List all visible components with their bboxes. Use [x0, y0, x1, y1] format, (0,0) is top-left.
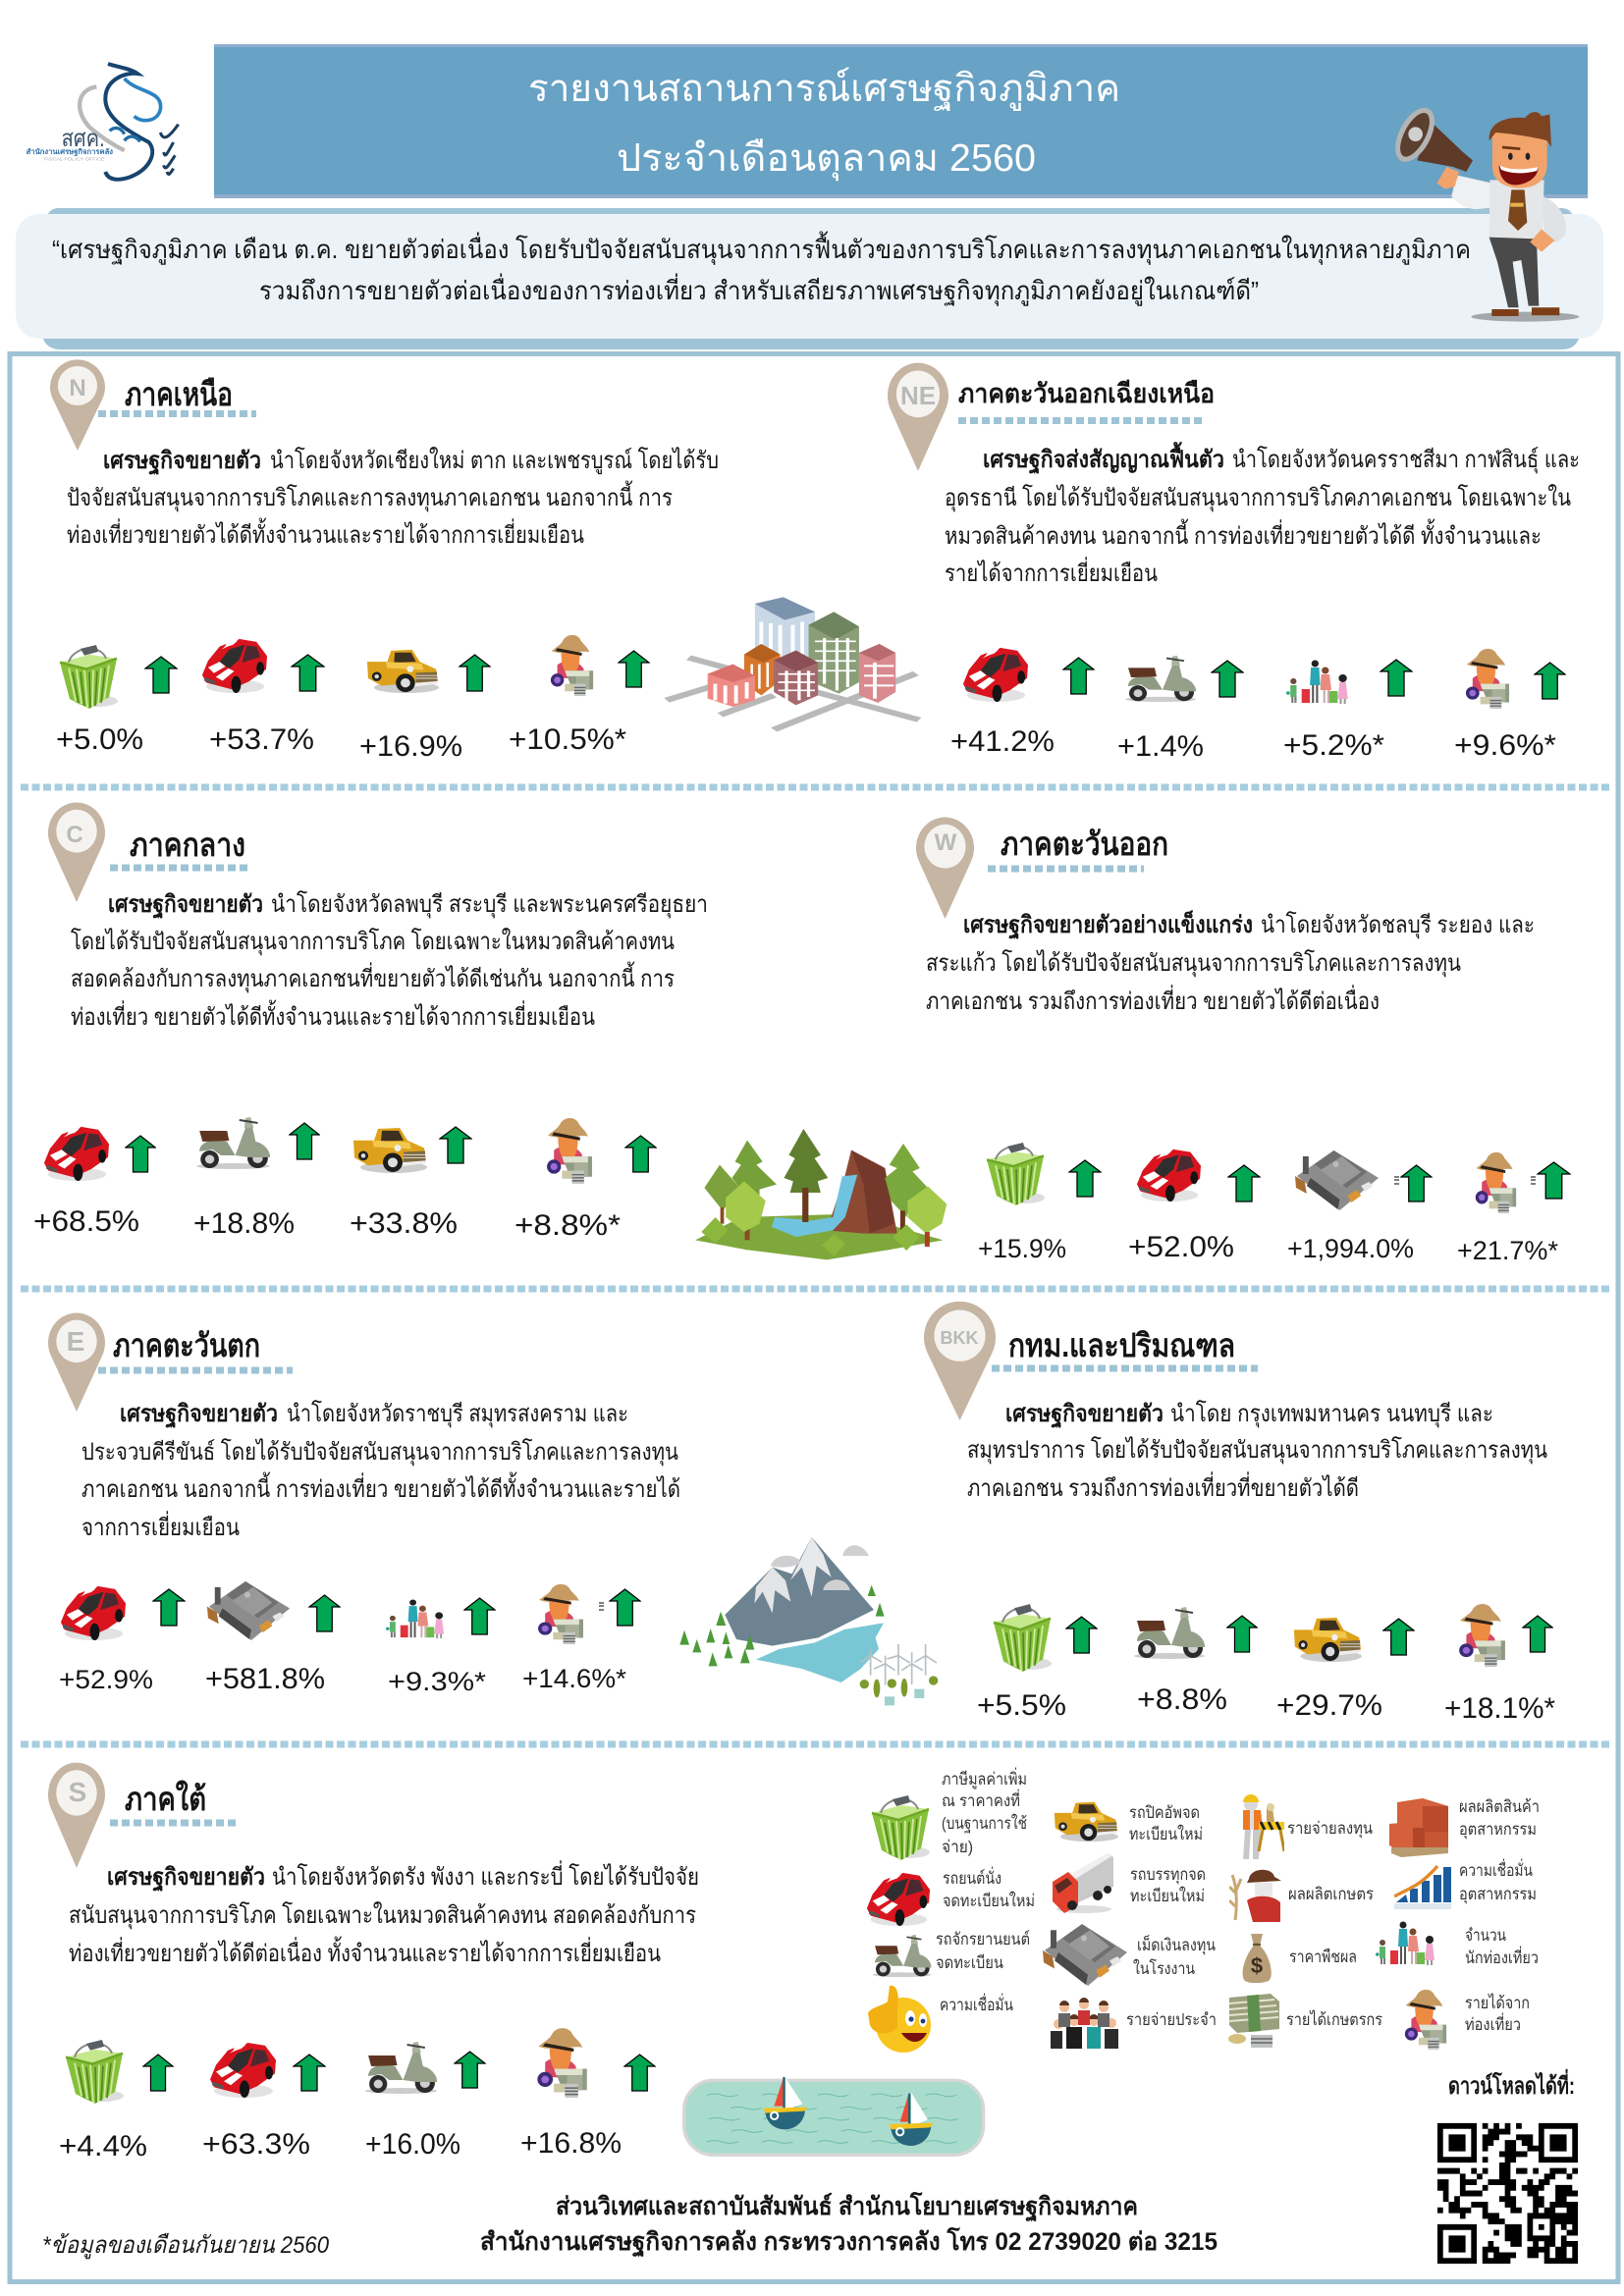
- indicators: +1,994.0%: [1287, 1234, 1414, 1263]
- legend: passenger car: จดทะเบียนใหม่: [943, 1891, 1035, 1910]
- legend: current spending: [1051, 1998, 1217, 2049]
- legend: tourism income: [1405, 1990, 1530, 2050]
- indicators: [59, 2028, 655, 2163]
- heading: กทม.และปริมณฑล: [1008, 1327, 1235, 1363]
- heading: ภาคตะวันตก: [113, 1327, 260, 1363]
- icon: location pin NE: NE: [900, 381, 936, 410]
- text block: ภาคเอกชน รวมถึงการท่องเที่ยว ขยายตัวได้ดีต่อเนื่อง: [926, 985, 1380, 1015]
- icon: location pin W: [916, 818, 974, 919]
- indicators: +16.0%: [365, 2128, 460, 2161]
- logo: สำนักงานเศรษฐกิจการคลัง: [27, 147, 113, 157]
- indicators: [950, 648, 1565, 763]
- footnote: *ข้อมูลของเดือนกันยายน 2560: [42, 2232, 330, 2260]
- panel: central region: [33, 803, 708, 1242]
- legend: farm income: [1228, 1994, 1382, 2048]
- indicators: +52.0%: [1128, 1231, 1234, 1263]
- title banner: [214, 44, 1588, 198]
- text block: เศรษฐกิจขยายตัว: [108, 891, 263, 920]
- text block: [71, 890, 708, 1031]
- text block: [67, 447, 719, 549]
- indicators: +68.5%: [33, 1205, 139, 1238]
- logo: สศค.: [62, 126, 105, 152]
- legend: investment spending: [1243, 1794, 1373, 1859]
- legend: industrial output: อุตสาหกรรม: [1459, 1820, 1537, 1840]
- legend: pickup: รถปิคอัพจด: [1129, 1803, 1200, 1822]
- legend: motorcycle: จดทะเบียน: [936, 1953, 1003, 1972]
- icon: location pin BKK: BKK: [941, 1328, 978, 1348]
- text block: เศรษฐกิจส่งสัญญาณฟื้นตัว: [983, 441, 1224, 475]
- legend: factory investment: ในโรงงาน: [1133, 1958, 1195, 1978]
- legend: tourism income: รายได้จาก: [1465, 1993, 1530, 2012]
- text block: สนับสนุนจากการบริโภค โดยเฉพาะในหมวดสินค้าคงทน สอดคล้องกับการ: [69, 1901, 696, 1930]
- indicators: [977, 1604, 1555, 1725]
- quote text line 1: “เศรษฐกิจภูมิภาค เดือน ต.ค. ขยายตัวต่อเนื่อง โดยรับปัจจัยสนับสนุนจากการฟื้นตัวของการบริโภคและการลงทุนภาคเอกชนในทุกหลายภูมิภาค: [52, 231, 1471, 265]
- legend: pickup: [1055, 1802, 1203, 1843]
- heading: [110, 1780, 239, 1823]
- indicators: +16.9%: [359, 730, 462, 763]
- text block: เศรษฐกิจขยายตัว: [103, 448, 261, 476]
- indicators: +5.2%*: [1283, 729, 1384, 762]
- indicators: +53.7%: [209, 723, 314, 756]
- panel: Bangkok and vicinity: [924, 1302, 1555, 1725]
- legend: farm output: [1229, 1870, 1374, 1922]
- legend: VAT: [872, 1767, 1027, 1860]
- legend: VAT: ภาษีมูลค่าเพิ่ม: [942, 1767, 1027, 1789]
- text block: ภาคเอกชน นอกจากนี้ การท่องเที่ยว ขยายตัวได้ดีทั้งจำนวนและรายได้: [81, 1471, 680, 1503]
- text block: ประจวบคีรีขันธ์ โดยได้รับปัจจัยสนับสนุนจากการบริโภคและการลงทุน: [81, 1438, 678, 1467]
- legend: current spending: รายจ่ายประจำ: [1126, 2010, 1217, 2029]
- text block: [81, 1400, 680, 1541]
- legend: motorcycle: รถจักรยานยนต์: [936, 1930, 1030, 1949]
- logo: [27, 64, 179, 180]
- indicators: +9.3%*: [388, 1667, 487, 1696]
- text block: เศรษฐกิจขยายตัว: [107, 1864, 265, 1893]
- legend: tourist count: [1376, 1922, 1539, 1967]
- text block: เศรษฐกิจขยายตัว: [120, 1401, 278, 1429]
- panel: southern region: [48, 1763, 699, 2163]
- text block: ปัจจัยสนับสนุนจากการบริโภคและการลงทุนภาคเอกชน นอกจากนี้ การ: [67, 480, 673, 512]
- title line 2: ประจำเดือนตุลาคม 2560: [617, 137, 1036, 182]
- heading: ภาคตะวันออกเฉียงเหนือ: [958, 379, 1215, 408]
- legend: farm income: รายได้เกษตรกร: [1286, 2009, 1382, 2029]
- legend: farm output: ผลผลิตเกษตร: [1288, 1885, 1374, 1903]
- legend: investment spending: รายจ่ายลงทุน: [1287, 1819, 1373, 1839]
- legend: motorcycle: [873, 1930, 1030, 1977]
- indicators: +581.8%: [205, 1663, 325, 1695]
- icon: location pin S: S: [69, 1777, 86, 1807]
- text block: รายได้จากการเยี่ยมเยือน: [945, 557, 1158, 587]
- text block: นำโดยจังหวัดเชียงใหม่ ตาก และเพชรบูรณ์ โดยได้รับ: [270, 447, 719, 475]
- indicators: [56, 635, 649, 763]
- heading: ภาคใต้: [125, 1780, 206, 1817]
- legend: truck: ทะเบียนใหม่: [1130, 1886, 1205, 1905]
- text block: ท่องเที่ยวขยายตัวได้ดีทั้งจำนวนและรายได้จากการเยี่ยมเยือน: [67, 517, 584, 549]
- indicators: +33.8%: [350, 1207, 458, 1240]
- text block: [926, 910, 1535, 1015]
- text block: [967, 1400, 1547, 1502]
- indicators: +9.6%*: [1454, 729, 1556, 762]
- title line 1: รายงานสถานการณ์เศรษฐกิจภูมิภาค: [528, 67, 1120, 111]
- dotted section dividers: [21, 787, 1609, 1744]
- quote text line 2: รวมถึงการขยายตัวต่อเนื่องของการท่องเที่ยว สำหรับเสถียรภาพเศรษฐกิจทุกภูมิภาคยังอยู่ในเกณฑ์ดี”: [259, 273, 1259, 306]
- footer credit: สำนักงานเศรษฐกิจการคลัง กระทรวงการคลัง โทร 02 2739020 ต่อ 3215: [480, 2226, 1218, 2258]
- text block: นำโดยจังหวัดตรัง พังงา และกระบี่ โดยได้รับปัจจัย: [272, 1860, 699, 1891]
- icon: man with megaphone: [1387, 101, 1579, 322]
- indicators: +8.8%: [1137, 1683, 1227, 1716]
- indicators: +41.2%: [950, 725, 1055, 758]
- heading: ภาคเหนือ: [125, 376, 233, 412]
- icon: location pin BKK: [924, 1302, 996, 1420]
- legend: tourist count: จำนวน: [1465, 1926, 1506, 1945]
- logo: FISCAL POLICY OFFICE: [44, 156, 105, 161]
- heading: ภาคกลาง: [130, 827, 245, 863]
- icon: location pin C: [48, 803, 105, 902]
- legend: tourism income: ท่องเที่ยว: [1465, 2012, 1521, 2034]
- legend: industrial output: [1389, 1797, 1540, 1857]
- indicators: +16.8%: [520, 2127, 622, 2160]
- illustration: boats on water: [684, 2077, 984, 2155]
- icon: location pin NE: [888, 363, 948, 471]
- text block: สระแก้ว โดยได้รับปัจจัยสนับสนุนจากการบริโภคและการลงทุน: [926, 949, 1461, 978]
- indicators: +18.1%*: [1444, 1692, 1555, 1725]
- illustration: city: [667, 597, 919, 729]
- legend: passenger car: รถยนต์นั่ง: [943, 1866, 1001, 1888]
- icon: location pin N: [50, 359, 105, 451]
- legend: VAT: (บนฐานการใช้: [942, 1813, 1027, 1834]
- indicators: [978, 1143, 1570, 1265]
- indicators: +5.5%: [977, 1689, 1066, 1722]
- heading: ภาคตะวันออก: [1001, 826, 1168, 862]
- text block: เศรษฐกิจขยายตัว: [1005, 1401, 1164, 1429]
- text block: ท่องเที่ยวขยายตัวได้ดีต่อเนื่อง ทั้งจำนวนและรายได้จากการเยี่ยมเยือน: [69, 1936, 661, 1967]
- indicators: +63.3%: [202, 2128, 310, 2161]
- legend: tourist count: นักท่องเที่ยว: [1465, 1946, 1539, 1967]
- footer credit: [480, 2191, 1218, 2258]
- legend: confidence: ความเชื่อมั่น: [940, 1993, 1013, 2014]
- icon: location pin E: E: [67, 1326, 84, 1357]
- text block: นำโดย กรุงเทพมหานคร นนทบุรี และ: [1170, 1400, 1493, 1428]
- icon: location pin E: [48, 1313, 105, 1412]
- legend: factory investment: [1043, 1924, 1216, 1986]
- legend: [867, 1767, 1540, 2053]
- legend: crop price: ราคาพืชผล: [1289, 1948, 1357, 1966]
- legend: truck: รถบรรทุกจด: [1130, 1865, 1206, 1885]
- legend: passenger car: [867, 1866, 1035, 1926]
- legend: industrial confidence: อุตสาหกรรม: [1459, 1885, 1537, 1904]
- text block: นำโดยจังหวัดราชบุรี สมุทรสงคราม และ: [287, 1400, 628, 1428]
- legend: VAT: จ่าย): [942, 1838, 973, 1856]
- indicators: +14.6%*: [522, 1664, 626, 1693]
- panel: northern region: [50, 359, 719, 763]
- footer credit: ส่วนวิเทศและสถาบันสัมพันธ์ สำนักนโยบายเศรษฐกิจมหภาค: [556, 2191, 1138, 2222]
- download label: ดาวน์โหลดได้ที่:: [1448, 2068, 1575, 2100]
- legend: industrial confidence: [1394, 1858, 1537, 1909]
- indicators: +8.8%*: [514, 1209, 621, 1242]
- indicators: +5.0%: [56, 723, 143, 756]
- text block: [945, 441, 1580, 587]
- legend: truck: [1053, 1853, 1206, 1913]
- indicators: +52.9%: [59, 1665, 153, 1694]
- panel: northeastern region: [888, 363, 1580, 763]
- indicators: +15.9%: [978, 1234, 1066, 1263]
- text block: [69, 1860, 699, 1967]
- text block: ภาคเอกชน รวมถึงการท่องเที่ยวที่ขยายตัวได้ดี: [967, 1471, 1359, 1502]
- legend: industrial confidence: ความเชื่อมั่น: [1459, 1858, 1533, 1880]
- icon: location pin N: N: [69, 375, 86, 401]
- legend: VAT: ณ ราคาคงที่: [942, 1789, 1020, 1810]
- icon: location pin W: W: [935, 829, 957, 856]
- legend: pickup: ทะเบียนใหม่: [1129, 1824, 1203, 1843]
- legend: factory investment: เม็ดเงินลงทุน: [1137, 1934, 1216, 1955]
- text block: ท่องเที่ยว ขยายตัวได้ดีทั้งจำนวนและรายได้จากการเยี่ยมเยือน: [71, 999, 595, 1031]
- text block: นำโดยจังหวัดชลบุรี ระยอง และ: [1261, 911, 1535, 939]
- indicators: [33, 1117, 656, 1242]
- text block: นำโดยจังหวัดลพบุรี สระบุรี และพระนครศรีอยุธยา: [271, 890, 708, 919]
- text block: สอดคล้องกับการลงทุนภาคเอกชนที่ขยายตัวได้ดีเช่นกัน นอกจากนี้ การ: [71, 961, 675, 993]
- illustration: mountains and lake: [679, 1537, 938, 1705]
- text block: โดยได้รับปัจจัยสนับสนุนจากการบริโภค โดยเฉพาะในหมวดสินค้าคงทน: [71, 928, 675, 956]
- legend: confidence: [868, 1986, 1013, 2053]
- panel: eastern region: [916, 818, 1570, 1265]
- indicators: +18.8%: [193, 1207, 295, 1240]
- text block: จากการเยี่ยมเยือน: [81, 1511, 240, 1541]
- indicators: [59, 1581, 640, 1696]
- illustration: forest and waterfall: [695, 1129, 947, 1259]
- QR code: [1437, 2126, 1578, 2261]
- icon: location pin S: [48, 1763, 105, 1868]
- indicators: +1.4%: [1117, 730, 1204, 763]
- text block: เศรษฐกิจขยายตัวอย่างแข็งแกร่ง: [963, 910, 1253, 940]
- indicators: +21.7%*: [1457, 1236, 1558, 1265]
- indicators: +29.7%: [1276, 1689, 1382, 1722]
- panel: western region: [48, 1313, 680, 1696]
- indicators: +4.4%: [59, 2130, 147, 2163]
- legend: industrial output: ผลผลิตสินค้า: [1459, 1797, 1540, 1816]
- legend: crop price: [1243, 1934, 1357, 1983]
- indicators: +10.5%*: [509, 723, 626, 756]
- quote panel: [16, 208, 1603, 349]
- icon: location pin C: C: [66, 822, 83, 848]
